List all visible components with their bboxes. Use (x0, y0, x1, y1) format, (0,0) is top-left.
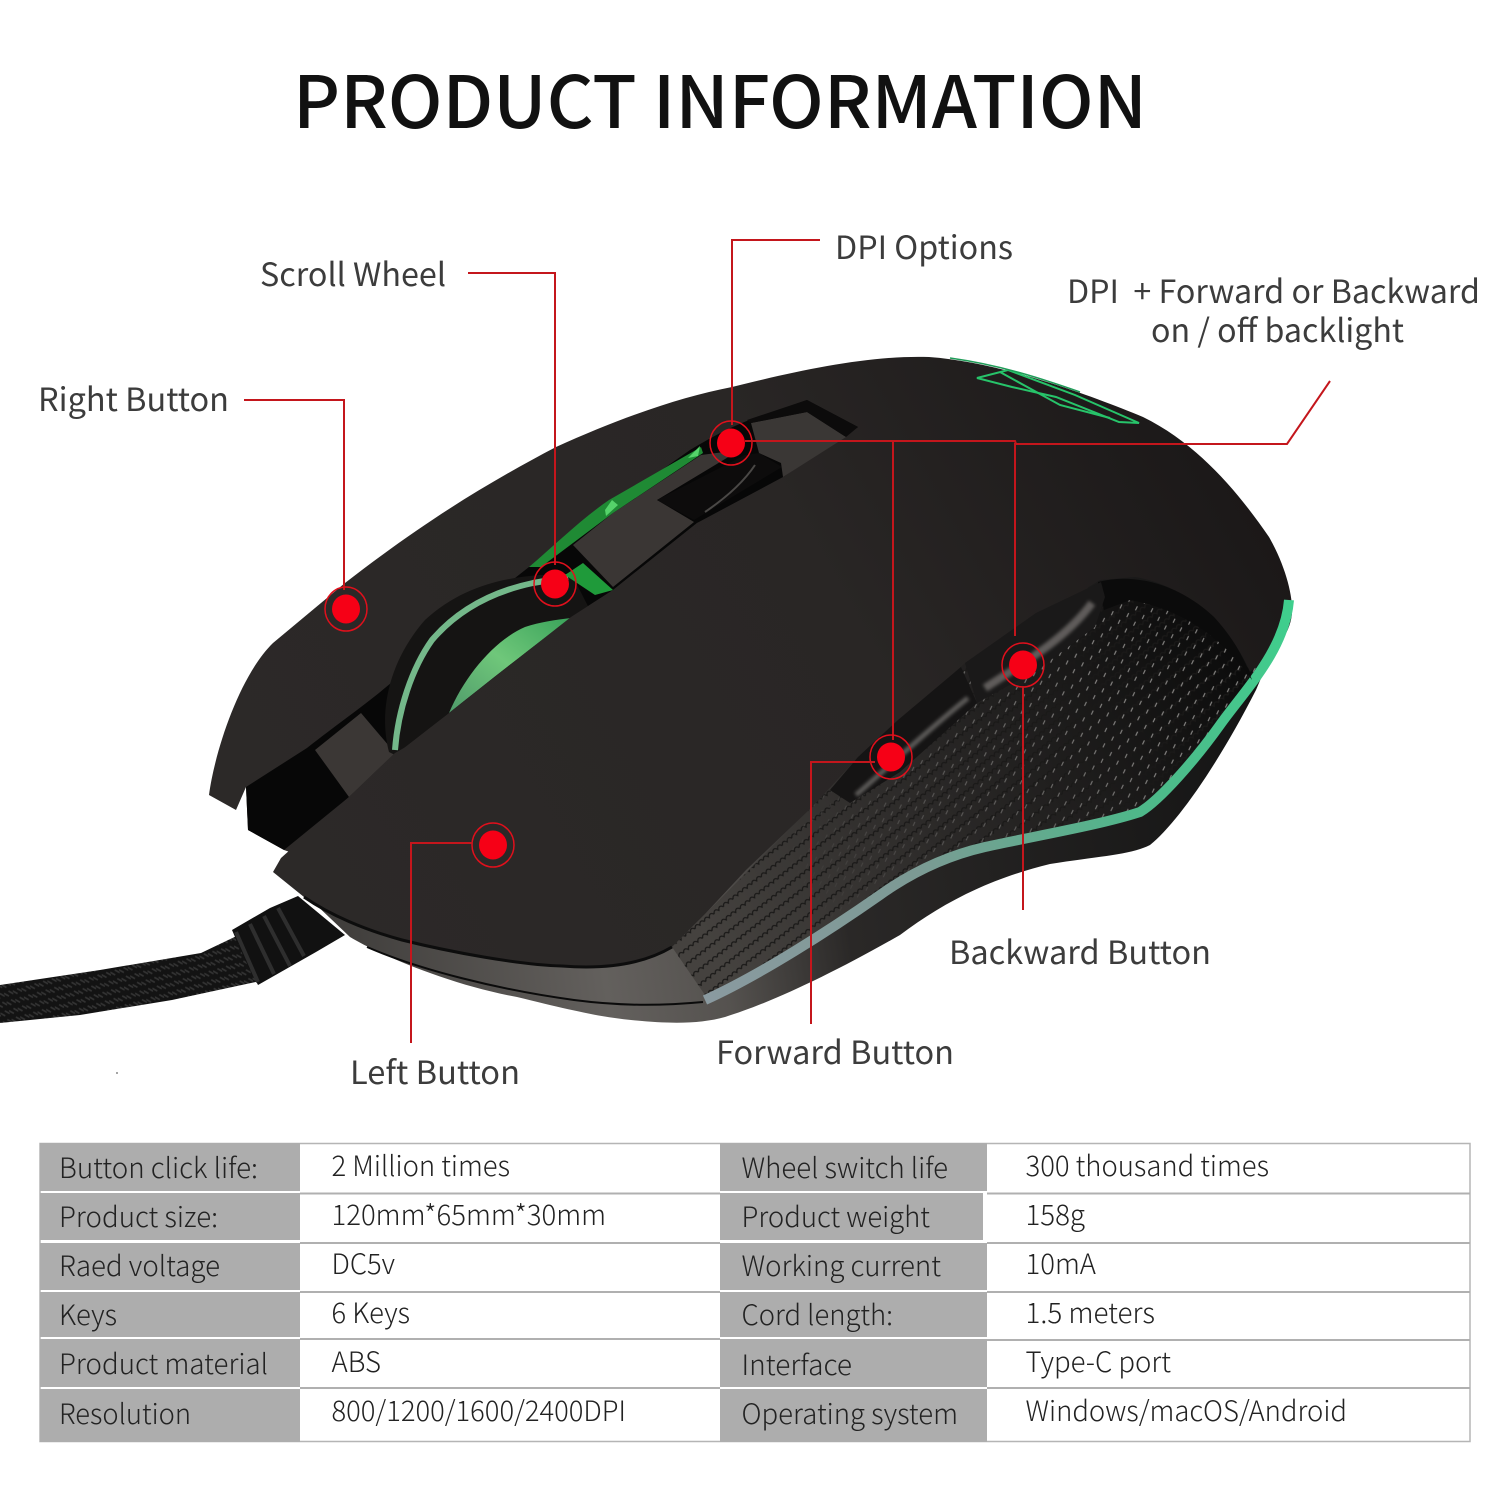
green light slot (529, 447, 703, 567)
label: backlight combination (1067, 267, 1480, 352)
left column labels: Raed voltage (59, 1245, 220, 1285)
callout: scroll wheel (260, 250, 576, 606)
leader line: backward button (1022, 686, 1024, 910)
label: forward button: Forward Button (716, 1028, 954, 1074)
upper body (209, 357, 1292, 960)
right button cavity (246, 400, 858, 850)
right column values: Type-C port (1026, 1341, 1171, 1381)
leader line: right button (244, 400, 344, 590)
marker: right button (325, 587, 367, 631)
marker: backward button (1002, 643, 1044, 687)
logo glow (950, 358, 1139, 423)
callout: backward button (949, 643, 1211, 974)
wheel green crescent (449, 618, 571, 713)
dpi button highlight (705, 465, 755, 512)
left button shell (273, 477, 1090, 967)
left column values: DC5v (332, 1243, 395, 1283)
marker: scroll wheel (534, 562, 576, 606)
right column labels: Interface (742, 1344, 852, 1384)
left column labels: Resolution (59, 1393, 191, 1433)
marker: forward button (870, 735, 912, 779)
label: backlight combination: on / off backlight (1151, 306, 1404, 352)
left column values: 6 Keys (332, 1292, 410, 1332)
callout: left button (350, 823, 520, 1094)
left column labels: Button click life: (59, 1147, 258, 1187)
title: PRODUCT INFORMATION (293, 44, 1147, 149)
right column labels: Working current (742, 1245, 941, 1285)
left label column (40, 1143, 300, 1442)
lower shell (290, 560, 1290, 1023)
label: scroll wheel: Scroll Wheel (260, 250, 446, 296)
label: backward button: Backward Button (949, 928, 1211, 974)
marker: dpi options (710, 421, 752, 465)
callout: dpi plus forward or backward (745, 267, 1480, 740)
right column values: 1.5 meters (1026, 1292, 1155, 1332)
center strip (315, 713, 395, 797)
left column labels: Product material (59, 1343, 268, 1383)
leader line: backlight combination (745, 381, 1330, 740)
callout: forward button (716, 735, 954, 1074)
leader line: scroll wheel (468, 273, 555, 565)
left column values (332, 1145, 626, 1430)
right column values: 300 thousand times (1026, 1145, 1269, 1185)
right column labels: Product weight (742, 1196, 930, 1236)
right column values: Windows/macOS/Android (1026, 1390, 1347, 1430)
upper slot rim (747, 400, 858, 437)
green highlight (605, 446, 700, 516)
right column labels: Cord length: (742, 1294, 893, 1334)
left column values: 120mm*65mm*30mm (332, 1194, 606, 1234)
upper slot panel (751, 412, 846, 477)
label: dpi options: DPI Options (835, 223, 1013, 269)
forward side button (830, 667, 977, 803)
right column values: 158g (1026, 1194, 1085, 1234)
left button edge highlight (304, 897, 672, 967)
mouse photo illustration (0, 357, 1292, 1023)
shell seam (367, 947, 703, 1005)
right column labels (742, 1147, 958, 1433)
right column labels: Operating system (742, 1393, 958, 1433)
marker: left button (472, 823, 514, 867)
left column values: 2 Million times (332, 1145, 510, 1185)
strip next to wheel (573, 450, 740, 587)
usb cable (0, 896, 345, 1023)
thumb groove (1098, 579, 1252, 680)
left column labels: Keys (59, 1294, 117, 1334)
right column labels: Wheel switch life (742, 1147, 948, 1187)
light strip (705, 600, 1289, 1000)
left column labels: Product size: (59, 1196, 218, 1236)
row lines (300, 1194, 1470, 1388)
label: left button: Left Button (350, 1048, 520, 1094)
right column values (1026, 1145, 1347, 1430)
left column values: ABS (332, 1341, 381, 1381)
left column values: 800/1200/1600/2400DPI (332, 1390, 626, 1430)
right label column (720, 1143, 987, 1442)
backward side button (965, 582, 1105, 703)
leader line: dpi options (732, 240, 820, 425)
callout: right button (38, 375, 367, 631)
dpi button (657, 453, 782, 520)
label: right button: Right Button (38, 375, 229, 421)
scroll wheel (385, 563, 613, 755)
table frame (40, 1144, 1470, 1442)
right column values: 10mA (1026, 1243, 1097, 1283)
label: backlight combination: DPI + Forward or Backward (1067, 267, 1480, 313)
left column labels (59, 1147, 268, 1433)
leader line: forward button (811, 762, 875, 1024)
leader line: left button (411, 843, 473, 1043)
callout: dpi options (710, 223, 1013, 465)
wheel green rim (395, 577, 568, 750)
specification table (40, 1143, 1470, 1442)
textured grip (672, 582, 1282, 995)
green glow near wheel (565, 563, 613, 595)
